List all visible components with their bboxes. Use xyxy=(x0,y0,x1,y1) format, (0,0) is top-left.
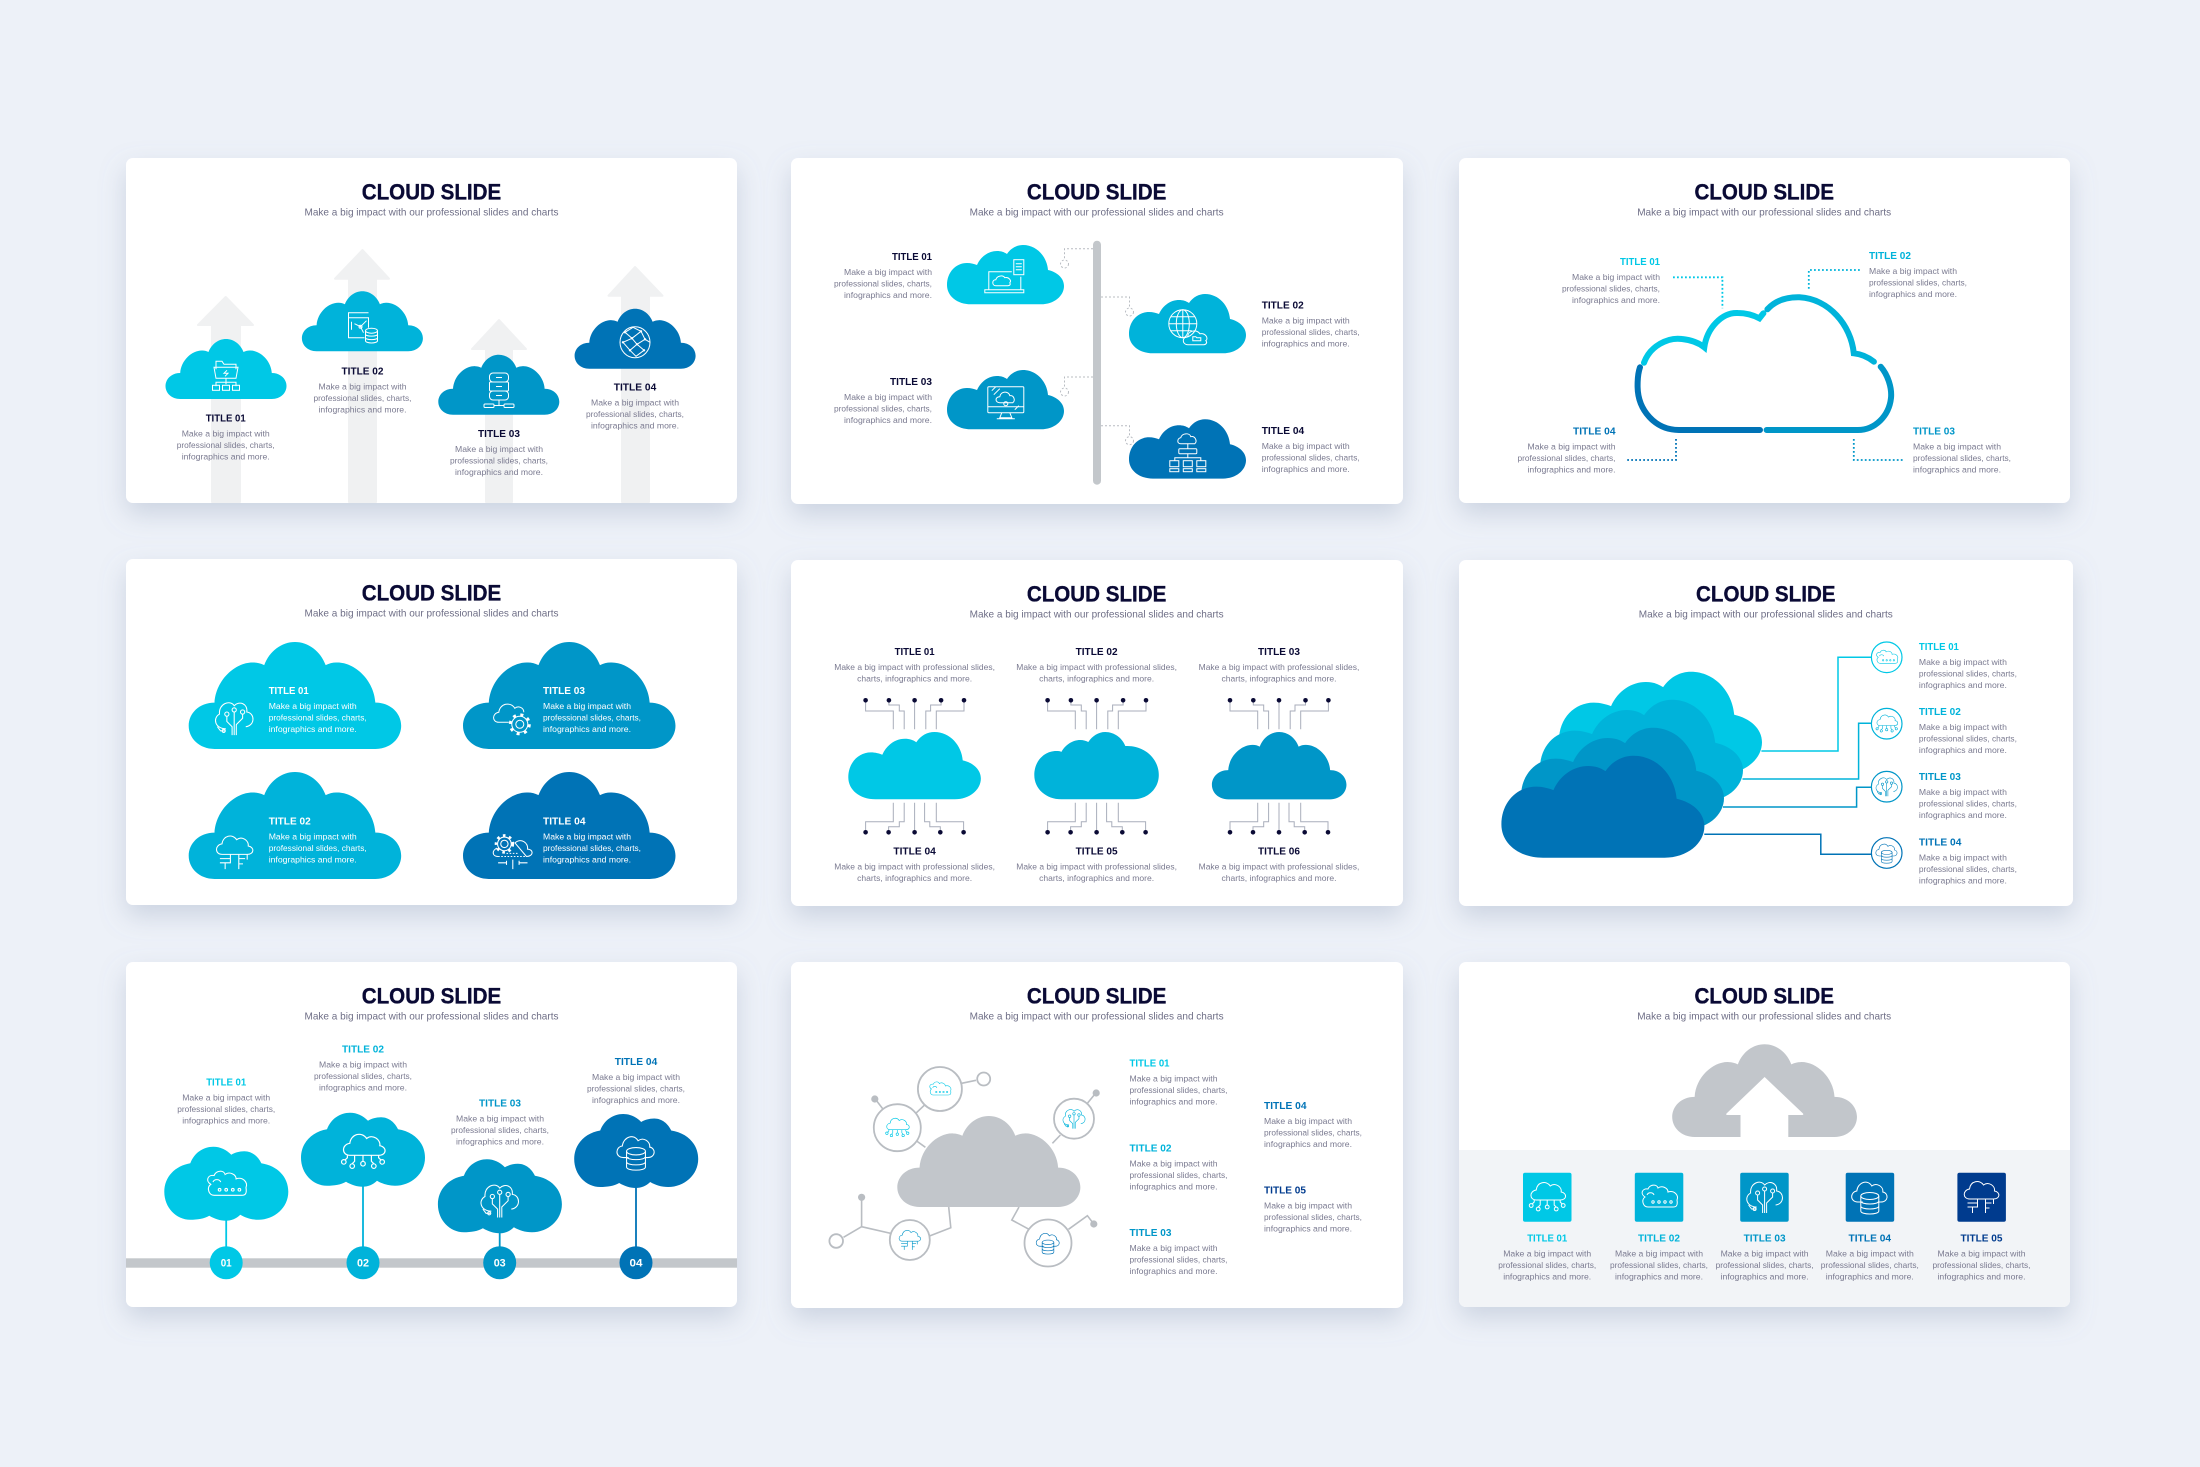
text: title 01: infographics and more. xyxy=(844,290,932,300)
text: title 01: professional slides, charts, xyxy=(177,1104,275,1114)
cloud left xyxy=(848,732,981,799)
text: title 03: Make a big impact with xyxy=(455,444,543,454)
heading: CLOUD SLIDE xyxy=(1694,179,1834,204)
text: title 03: TITLE 03 xyxy=(478,428,520,440)
text: title 03 xyxy=(1913,426,2011,475)
panel: rising arrows slide xyxy=(126,158,737,503)
heading: CLOUD SLIDE xyxy=(362,983,501,1008)
icon: cloud tree xyxy=(215,703,253,735)
text: title 04: professional slides, charts, xyxy=(1264,1128,1362,1138)
text: title 04: professional slides, charts, xyxy=(1821,1260,1919,1270)
heading: CLOUD SLIDE xyxy=(1696,582,1836,607)
text: title 02 xyxy=(269,816,367,865)
heading: Make a big impact with our professional slides and charts xyxy=(304,608,558,620)
text: title 01 xyxy=(1919,641,2017,690)
text: title 04 xyxy=(1264,1100,1362,1149)
text: title 04: Make a big impact with xyxy=(1528,442,1616,452)
text: title 05: TITLE 05 xyxy=(1264,1185,1306,1197)
tile 02 xyxy=(1635,1173,1683,1222)
heading: CLOUD SLIDE xyxy=(362,581,501,606)
text: title 02 xyxy=(1869,250,1967,299)
text: title 03: professional slides, charts, xyxy=(1130,1254,1228,1264)
node 03 xyxy=(483,1246,516,1279)
node 01 xyxy=(210,1246,243,1279)
gray cloud xyxy=(897,1116,1080,1207)
text: title 02: Make a big impact with xyxy=(269,832,357,842)
node 02 xyxy=(346,1246,380,1279)
text: title 02: Make a big impact with xyxy=(1262,316,1350,326)
text: title 04: professional slides, charts, xyxy=(1262,452,1360,462)
text: title 05: charts, infographics and more. xyxy=(1039,873,1154,883)
text: title 04: infographics and more. xyxy=(591,420,679,430)
text: title 01: infographics and more. xyxy=(1919,680,2007,690)
text: title 03: TITLE 03 xyxy=(1913,426,1955,438)
text: title 01: professional slides, charts, xyxy=(1130,1085,1228,1095)
text: title 02 xyxy=(1130,1142,1228,1191)
text: title 02: infographics and more. xyxy=(1869,289,1957,299)
text: title 02 xyxy=(314,365,412,414)
text: title 01: professional slides, charts, xyxy=(177,440,275,450)
text: title 02: TITLE 02 xyxy=(1076,646,1118,658)
heading xyxy=(304,179,558,218)
heading xyxy=(970,983,1224,1022)
text: title 03: infographics and more. xyxy=(1130,1266,1218,1276)
cloud 02 xyxy=(302,291,423,351)
text: title 03: TITLE 03 xyxy=(890,376,932,388)
text: title 01 xyxy=(269,685,367,734)
text: title 01: TITLE 01 xyxy=(206,1077,246,1089)
text: title 03: charts, infographics and more. xyxy=(1222,674,1336,684)
text: title 03 xyxy=(451,1097,549,1146)
text: title 04: Make a big impact with xyxy=(1264,1116,1352,1126)
text: title 03: TITLE 03 xyxy=(1130,1227,1172,1239)
heading xyxy=(304,983,558,1022)
text: title 01: Make a big impact with xyxy=(269,701,357,711)
vertical bar xyxy=(1093,241,1101,485)
text: title 03: infographics and more. xyxy=(456,1136,544,1146)
text: title 06: Make a big impact with professional slides, xyxy=(1199,861,1359,871)
icon circle 5 xyxy=(1024,1220,1072,1266)
text: title 02: TITLE 02 xyxy=(342,365,384,377)
panel: network cloud slide xyxy=(791,962,1403,1308)
text: title 03: professional slides, charts, xyxy=(834,404,932,414)
heading xyxy=(1639,582,1893,621)
icon circle 4 xyxy=(890,1220,930,1260)
cloud right xyxy=(1212,732,1346,799)
text: title 03: professional slides, charts, xyxy=(450,456,548,466)
upload cloud xyxy=(1672,1044,1857,1138)
text: title 01: charts, infographics and more. xyxy=(857,674,972,684)
heading xyxy=(1637,983,1891,1022)
text: title 04 xyxy=(587,1056,685,1105)
tile 03 xyxy=(1740,1173,1789,1222)
text: title 02: charts, infographics and more. xyxy=(1039,674,1154,684)
text: title 01: Make a big impact with xyxy=(844,267,932,277)
panel: segmented cloud outline slide xyxy=(1459,158,2070,503)
heading xyxy=(1637,179,1891,218)
text: title 02: Make a big impact with xyxy=(1615,1249,1703,1259)
text: title 01: infographics and more. xyxy=(1130,1097,1218,1107)
node 01: 01 xyxy=(221,1258,232,1270)
text: title 01 xyxy=(1130,1058,1228,1107)
text: title 04: Make a big impact with xyxy=(543,832,631,842)
stems xyxy=(226,1186,636,1250)
circuit lines column 2 xyxy=(1045,698,1148,835)
text: title 02: infographics and more. xyxy=(1130,1181,1218,1191)
text: title 02: Make a big impact with xyxy=(318,381,407,391)
text: title 02: infographics and more. xyxy=(1919,745,2007,755)
text: title 01: infographics and more. xyxy=(182,1116,270,1126)
circuit lines column 3 xyxy=(1228,698,1331,835)
text: title 02: infographics and more. xyxy=(269,855,357,865)
text: title 01 xyxy=(834,646,995,684)
icon circle 2 xyxy=(874,1104,921,1151)
text: title 01: Make a big impact with xyxy=(1130,1074,1218,1084)
text: title 02 xyxy=(1016,646,1177,684)
text: title 03: professional slides, charts, xyxy=(543,712,641,722)
text: title 03 xyxy=(543,685,641,734)
text: title 05: TITLE 05 xyxy=(1960,1233,2003,1245)
icon circle 03 xyxy=(1871,771,1902,802)
text: title 02: professional slides, charts, xyxy=(314,1071,412,1081)
panel: four text clouds slide xyxy=(126,559,737,905)
icon circle 3 xyxy=(1054,1099,1094,1139)
text: title 02 xyxy=(314,1044,412,1093)
text: title 01: TITLE 01 xyxy=(892,251,932,263)
text: title 04: Make a big impact with xyxy=(1826,1249,1914,1259)
text: title 04: TITLE 04 xyxy=(615,1056,657,1068)
text: title 01 xyxy=(1562,256,1660,305)
text: title 01: Make a big impact with professional slides, xyxy=(834,662,995,672)
text: title 05: professional slides, charts, xyxy=(1264,1212,1362,1222)
text: title 03: TITLE 03 xyxy=(543,685,585,697)
network lines xyxy=(844,1080,1095,1237)
icon circle 01 xyxy=(1871,642,1902,673)
text: title 04: infographics and more. xyxy=(592,1095,680,1105)
heading: Make a big impact with our professional slides and charts xyxy=(970,609,1224,621)
text: title 04: infographics and more. xyxy=(1826,1272,1914,1282)
segmented cloud outline xyxy=(1638,297,1891,430)
text: title 02: professional slides, charts, xyxy=(269,843,367,853)
text: title 01 xyxy=(177,413,275,462)
text: title 05 xyxy=(1264,1185,1362,1234)
icon circle 1 xyxy=(918,1067,962,1111)
text: title 04: TITLE 04 xyxy=(1849,1233,1891,1245)
text: title 01: infographics and more. xyxy=(1572,295,1660,305)
text: title 02: professional slides, charts, xyxy=(1869,278,1967,288)
text: title 05: infographics and more. xyxy=(1938,1272,2026,1282)
tile 01 xyxy=(1523,1173,1572,1222)
text: title 04: professional slides, charts, xyxy=(586,409,684,419)
text: title 02: professional slides, charts, xyxy=(1610,1260,1708,1270)
text: title 04: Make a big impact with xyxy=(1262,441,1350,451)
text: title 02: TITLE 02 xyxy=(1919,706,1961,718)
text: title 02: Make a big impact with xyxy=(1919,722,2007,732)
cloud 04 xyxy=(574,1114,698,1188)
text: title 04: infographics and more. xyxy=(1528,465,1616,475)
text: title 02: TITLE 02 xyxy=(1869,250,1911,262)
cloud 02 xyxy=(1129,294,1246,353)
text: title 03: infographics and more. xyxy=(1913,465,2001,475)
cloud 02 xyxy=(301,1113,425,1187)
text: title 04: infographics and more. xyxy=(1264,1139,1352,1149)
text: title 02: infographics and more. xyxy=(1615,1272,1703,1282)
text: title 03: Make a big impact with professional slides, xyxy=(1199,662,1359,672)
text: title 03: TITLE 03 xyxy=(1919,771,1961,783)
text: title 03: Make a big impact with xyxy=(844,392,932,402)
heading: Make a big impact with our professional slides and charts xyxy=(970,1010,1224,1022)
text: title 04: TITLE 04 xyxy=(893,845,936,857)
cloud 04 xyxy=(463,772,675,879)
text: title 05: TITLE 05 xyxy=(1076,845,1118,857)
text: title 06 xyxy=(1199,845,1359,883)
text: title 01: Make a big impact with xyxy=(182,429,270,439)
icon circle 04 xyxy=(1871,838,1902,868)
text: title 04: TITLE 04 xyxy=(1919,836,1962,848)
text: title 02: professional slides, charts, xyxy=(314,393,412,403)
text: title 06: charts, infographics and more. xyxy=(1222,873,1336,883)
circuit lines column 1 xyxy=(863,698,966,835)
panel: vertical timeline slide xyxy=(791,158,1403,504)
text: title 01: professional slides, charts, xyxy=(269,712,367,722)
node 02: 02 xyxy=(357,1258,369,1270)
heading: Make a big impact with our professional slides and charts xyxy=(1639,609,1893,621)
text: title 02: Make a big impact with professional slides, xyxy=(1016,662,1177,672)
text: title 01: Make a big impact with xyxy=(182,1093,270,1103)
text: title 04: Make a big impact with xyxy=(591,397,679,407)
cloud 03 xyxy=(438,355,559,415)
text: title 03: infographics and more. xyxy=(1919,810,2007,820)
text: title 05: infographics and more. xyxy=(1264,1224,1352,1234)
text: title 03: infographics and more. xyxy=(455,467,543,477)
text: title 04 xyxy=(543,816,641,865)
text: title 03: professional slides, charts, xyxy=(451,1125,549,1135)
text: title 03: TITLE 03 xyxy=(479,1097,521,1109)
text: title 01: professional slides, charts, xyxy=(834,278,932,288)
text: title 03: TITLE 03 xyxy=(1258,646,1300,658)
text: title 01: Make a big impact with xyxy=(1919,657,2007,667)
text: title 01: infographics and more. xyxy=(182,452,270,462)
text: title 04: TITLE 04 xyxy=(543,816,586,828)
text: title 03: Make a big impact with xyxy=(1721,1249,1809,1259)
timeline band xyxy=(126,1258,737,1268)
text: title 04: TITLE 04 xyxy=(1262,425,1304,437)
text: title 04: TITLE 04 xyxy=(1264,1100,1307,1112)
text: title 02: professional slides, charts, xyxy=(1919,734,2017,744)
text: title 03: Make a big impact with xyxy=(1130,1243,1218,1253)
heading xyxy=(970,179,1224,218)
text: title 03: infographics and more. xyxy=(844,415,932,425)
text: title 01: professional slides, charts, xyxy=(1498,1260,1596,1270)
text: title 01: TITLE 01 xyxy=(1919,641,1959,653)
text: title 02 xyxy=(1919,706,2017,755)
cloud 01 xyxy=(166,339,286,399)
text: title 04 xyxy=(1821,1233,1919,1282)
text: title 02: infographics and more. xyxy=(1262,339,1350,349)
text: title 04: professional slides, charts, xyxy=(587,1084,685,1094)
cloud 03 xyxy=(463,642,675,749)
panel: cloud upload slide xyxy=(1459,962,2070,1307)
text: title 02: TITLE 02 xyxy=(1638,1233,1680,1245)
text: title 02: TITLE 02 xyxy=(269,816,311,828)
cloud 01 xyxy=(947,245,1064,304)
text: title 01: TITLE 01 xyxy=(1130,1058,1170,1070)
heading: Make a big impact with our professional slides and charts xyxy=(970,206,1224,218)
text: title 02: professional slides, charts, xyxy=(1262,327,1360,337)
text: title 04: Make a big impact with xyxy=(1919,852,2007,862)
text: title 03 xyxy=(834,376,932,425)
text: title 04 xyxy=(1518,426,1616,475)
panel: horizontal timeline slide xyxy=(126,962,737,1307)
text: title 04: charts, infographics and more. xyxy=(857,873,972,883)
text: title 03: TITLE 03 xyxy=(1744,1233,1786,1245)
arrows xyxy=(198,250,662,502)
text: title 01: infographics and more. xyxy=(1503,1272,1591,1282)
text: title 01: Make a big impact with xyxy=(1572,272,1660,282)
text: title 02: infographics and more. xyxy=(318,404,406,414)
text: title 03 xyxy=(1199,646,1359,684)
text: title 03: infographics and more. xyxy=(1721,1272,1809,1282)
text: title 02: infographics and more. xyxy=(319,1083,407,1093)
text: title 05: professional slides, charts, xyxy=(1932,1260,2030,1270)
text: title 05 xyxy=(1932,1233,2030,1282)
text: title 03 xyxy=(1919,771,2017,820)
text: title 01 xyxy=(834,251,932,300)
text: title 02: TITLE 02 xyxy=(1130,1142,1172,1154)
text: title 05: Make a big impact with xyxy=(1264,1201,1352,1211)
node 04: 04 xyxy=(630,1258,643,1270)
cloud 04 xyxy=(575,309,696,369)
heading: Make a big impact with our professional slides and charts xyxy=(1637,1010,1891,1022)
text: title 01 xyxy=(177,1077,275,1126)
icon: cloud gear arrows xyxy=(493,836,532,869)
tile 05 xyxy=(1957,1173,2006,1222)
text: title 04: Make a big impact with professional slides, xyxy=(834,861,995,871)
text: title 02: professional slides, charts, xyxy=(1130,1170,1228,1180)
cloud 03 xyxy=(947,370,1064,429)
heading: CLOUD SLIDE xyxy=(1027,983,1166,1008)
text: title 02 xyxy=(1610,1233,1708,1282)
text: title 04 xyxy=(586,381,684,430)
heading: CLOUD SLIDE xyxy=(1027,582,1166,607)
cloud 01 xyxy=(189,642,401,749)
text: title 01: TITLE 01 xyxy=(1527,1233,1567,1245)
text: title 01 xyxy=(1498,1233,1596,1282)
text: title 02: TITLE 02 xyxy=(342,1044,384,1056)
text: title 04 xyxy=(1919,836,2017,885)
text: title 02: Make a big impact with xyxy=(319,1060,407,1070)
text: title 02: Make a big impact with xyxy=(1869,266,1957,276)
text: title 04: professional slides, charts, xyxy=(1919,864,2017,874)
text: title 04: TITLE 04 xyxy=(1573,426,1616,438)
text: title 04: infographics and more. xyxy=(1919,875,2007,885)
text: title 06: TITLE 06 xyxy=(1258,845,1300,857)
text: title 01: TITLE 01 xyxy=(269,685,309,697)
text: title 04: TITLE 04 xyxy=(614,381,656,393)
panel: circuit clouds slide xyxy=(791,560,1403,906)
text: title 04: professional slides, charts, xyxy=(543,843,641,853)
heading: Make a big impact with our professional slides and charts xyxy=(304,206,558,218)
icon: cloud gear xyxy=(494,704,529,734)
heading: CLOUD SLIDE xyxy=(1027,179,1166,204)
text: title 01: TITLE 01 xyxy=(1620,256,1660,268)
cloud 03 xyxy=(438,1159,562,1233)
heading: Make a big impact with our professional slides and charts xyxy=(304,1010,558,1022)
panel: layered clouds slide xyxy=(1459,560,2073,906)
dotted connectors xyxy=(1627,270,1904,460)
node 03: 03 xyxy=(494,1258,506,1270)
text: title 03: Make a big impact with xyxy=(1919,787,2007,797)
text: title 03 xyxy=(1130,1227,1228,1276)
text: title 01: infographics and more. xyxy=(269,724,357,734)
text: title 03: Make a big impact with xyxy=(456,1113,544,1123)
icon circle 02 xyxy=(1871,708,1902,739)
lower band xyxy=(1459,1150,2070,1307)
text: title 04: Make a big impact with xyxy=(592,1072,680,1082)
text: title 02: TITLE 02 xyxy=(1262,300,1304,312)
text: title 01: professional slides, charts, xyxy=(1562,284,1660,294)
icon: cloud circuit xyxy=(216,836,253,869)
text: title 03: professional slides, charts, xyxy=(1913,453,2011,463)
heading xyxy=(304,581,558,620)
text: title 05: Make a big impact with xyxy=(1938,1249,2026,1259)
text: title 04: infographics and more. xyxy=(1262,464,1350,474)
text: title 01: professional slides, charts, xyxy=(1919,668,2017,678)
text: title 04 xyxy=(834,845,995,883)
layered clouds xyxy=(1501,672,1762,858)
cloud 02 xyxy=(189,772,401,879)
text: title 05: Make a big impact with professional slides, xyxy=(1016,861,1177,871)
text: title 01: TITLE 01 xyxy=(206,413,246,425)
heading: CLOUD SLIDE xyxy=(362,179,501,204)
text: title 03: professional slides, charts, xyxy=(1716,1260,1814,1270)
text: title 03: Make a big impact with xyxy=(1913,442,2001,452)
connector lines xyxy=(1704,657,1872,854)
heading xyxy=(970,582,1224,621)
end nodes xyxy=(829,1072,1100,1248)
text: title 01: Make a big impact with xyxy=(1503,1249,1591,1259)
text: title 02: Make a big impact with xyxy=(1130,1158,1218,1168)
text: title 02 xyxy=(1262,300,1360,349)
cloud middle xyxy=(1034,732,1159,799)
node 04 xyxy=(620,1246,652,1279)
text: title 03 xyxy=(1716,1233,1814,1282)
text: title 03 xyxy=(450,428,548,477)
cloud 01 xyxy=(164,1147,288,1221)
text: title 01: TITLE 01 xyxy=(895,646,935,658)
text: title 03: infographics and more. xyxy=(543,724,631,734)
dotted connectors xyxy=(1060,249,1134,445)
text: title 04 xyxy=(1262,425,1360,474)
text: title 04: infographics and more. xyxy=(543,855,631,865)
text: title 04: professional slides, charts, xyxy=(1518,453,1616,463)
heading: Make a big impact with our professional slides and charts xyxy=(1637,206,1891,218)
heading: CLOUD SLIDE xyxy=(1694,983,1834,1008)
cloud 04 xyxy=(1129,419,1246,479)
text: title 03: Make a big impact with xyxy=(543,701,631,711)
tile 04 xyxy=(1846,1173,1894,1222)
text: title 03: professional slides, charts, xyxy=(1919,798,2017,808)
text: title 05 xyxy=(1016,845,1177,883)
